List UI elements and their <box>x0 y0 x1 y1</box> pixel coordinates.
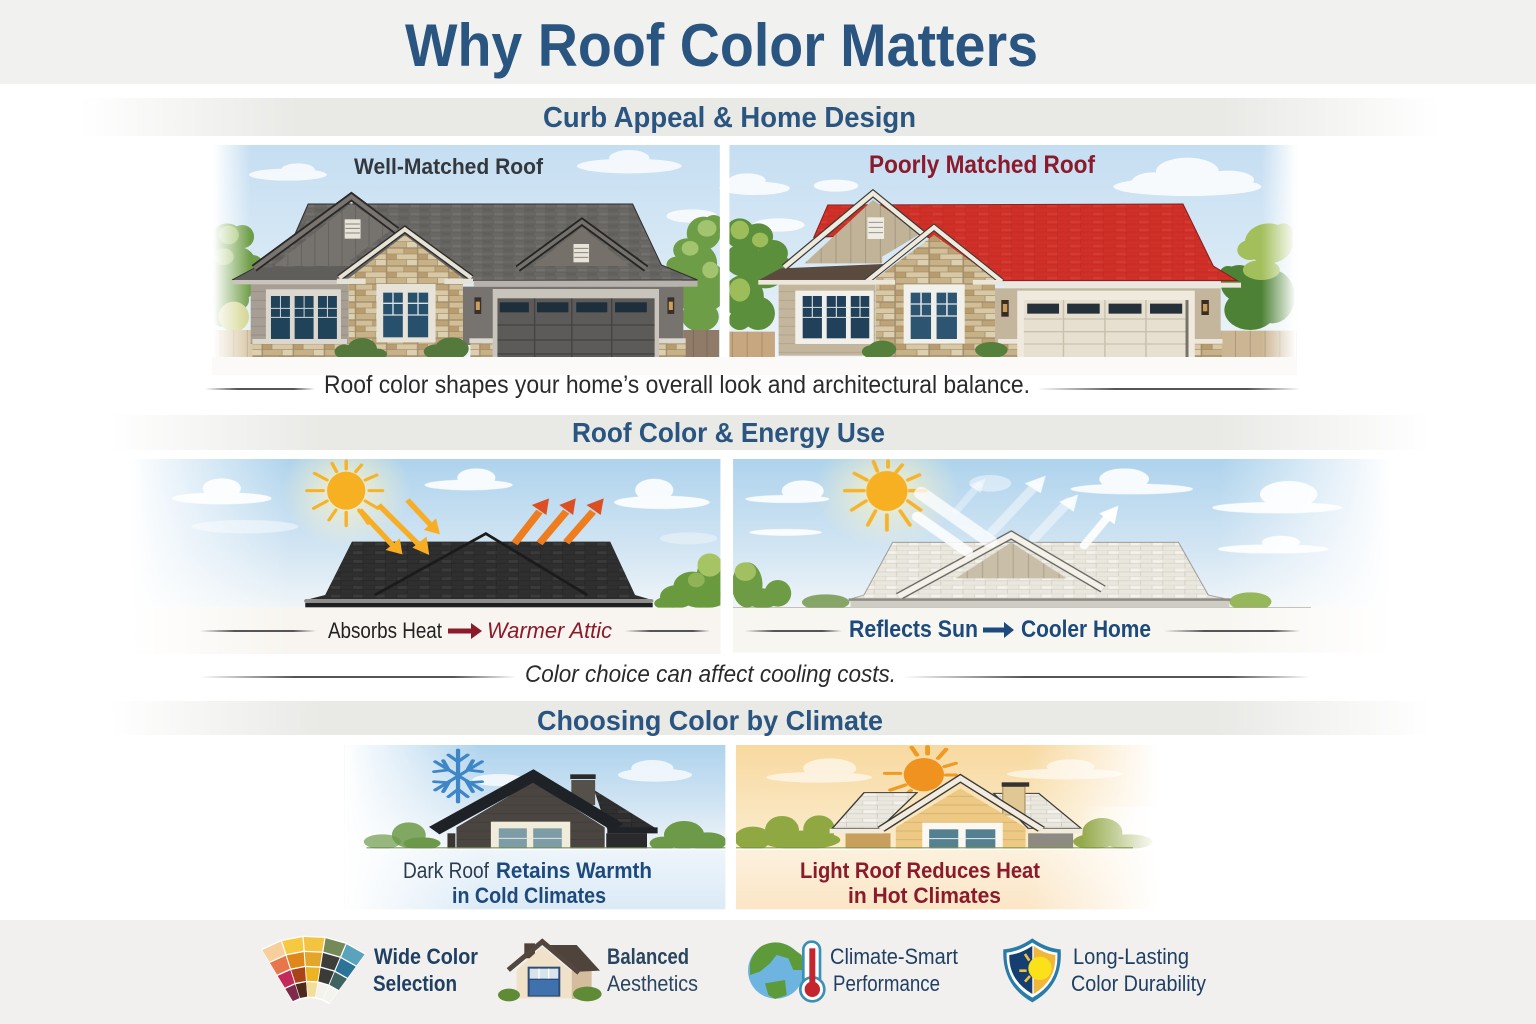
caption: absorbs heat: Absorbs Heat <box>328 618 442 643</box>
rule <box>745 630 842 632</box>
bushes <box>862 341 1008 358</box>
sun <box>845 461 925 530</box>
caption: cooling costs: Color choice can affect cooling costs. <box>525 661 896 688</box>
caption: warmer attic: Warmer Attic <box>487 618 612 643</box>
icon: color fan <box>261 936 366 1008</box>
icon: shield <box>1003 938 1061 1002</box>
arrows: heat out <box>515 498 604 543</box>
label: well-matched: Well-Matched Roof <box>354 154 544 179</box>
panel: cold climate <box>344 743 726 912</box>
heading: energy: Roof Color & Energy Use <box>572 417 885 448</box>
icon: globe and thermometer <box>748 942 824 1001</box>
text: balanced aesthetics <box>607 944 698 996</box>
arrow: red <box>448 623 482 639</box>
panel: hot climate <box>734 743 1158 912</box>
rule <box>200 630 316 632</box>
arrows: reflected light <box>917 476 1118 552</box>
caption: retains warmth: Retains Warmth <box>496 858 652 883</box>
icon: snowflake <box>434 750 482 802</box>
panel: poorly matched house <box>719 145 1296 358</box>
stone base <box>999 344 1222 357</box>
footer band <box>0 920 1536 1024</box>
bushes <box>334 337 469 357</box>
panel: light roof reflects sun <box>732 434 1392 658</box>
caption: cold climates: in Cold Climates <box>452 883 606 908</box>
label: poorly matched: Poorly Matched Roof <box>869 151 1096 179</box>
text: long-lasting durability <box>1071 944 1206 996</box>
icon: house <box>498 942 602 1001</box>
rule <box>1164 630 1300 632</box>
pale strip <box>212 357 1297 375</box>
arrows: heat in <box>360 500 440 555</box>
house: dark roof <box>434 774 658 848</box>
roof: black shingles <box>304 542 653 600</box>
caption: cooler home: Cooler Home <box>1021 616 1151 643</box>
text: long-lasting durability: Color Durability <box>1071 971 1206 996</box>
caption: reflects sun: Reflects Sun <box>849 616 978 643</box>
text: wide color selection <box>373 944 478 996</box>
section band: curb appeal <box>80 98 1440 136</box>
garage door <box>1017 291 1195 357</box>
text: climate-smart performance: Performance <box>833 971 940 996</box>
rule <box>625 630 710 632</box>
garage door <box>493 289 659 357</box>
panel: well-matched house <box>205 145 727 361</box>
windows <box>795 284 965 344</box>
rule <box>903 676 1310 678</box>
text: wide color selection: Selection <box>373 971 457 996</box>
roof: white shingles <box>849 542 1229 600</box>
stone base <box>252 343 686 357</box>
rule left <box>205 388 315 390</box>
roof: charcoal shingles <box>232 204 698 281</box>
rule <box>200 676 516 678</box>
heading: curb appeal: Curb Appeal & Home Design <box>543 102 916 134</box>
rule right <box>1037 388 1300 390</box>
caption: dark roof: Dark Roof <box>403 858 490 883</box>
text: climate-smart performance: Climate-Smart <box>830 944 958 969</box>
arrow: blue <box>983 622 1014 638</box>
roof: bright red shingles <box>814 204 1237 281</box>
heading: climate: Choosing Color by Climate <box>537 705 883 736</box>
caption: curb appeal: Roof color shapes your home’s overall look and architectural balance. <box>324 371 1030 399</box>
title: Why Roof Color Matters <box>405 12 1038 79</box>
caption: hot climates: in Hot Climates <box>848 883 1001 908</box>
text: wide color selection: Wide Color <box>374 944 478 969</box>
text: long-lasting durability: Long-Lasting <box>1073 944 1189 969</box>
sun <box>307 461 383 526</box>
windows <box>252 284 436 344</box>
section band: energy <box>110 415 1430 450</box>
house: light roof <box>830 778 1083 848</box>
panel: dark roof absorbs heat <box>130 434 727 656</box>
caption: light roof: Light Roof Reduces Heat <box>800 858 1041 883</box>
text: balanced aesthetics: Aesthetics <box>607 971 698 996</box>
text: balanced aesthetics: Balanced <box>607 944 689 969</box>
text: climate-smart performance <box>830 944 958 996</box>
sun <box>885 747 956 800</box>
header band <box>0 0 1536 84</box>
section band: climate <box>110 701 1430 735</box>
